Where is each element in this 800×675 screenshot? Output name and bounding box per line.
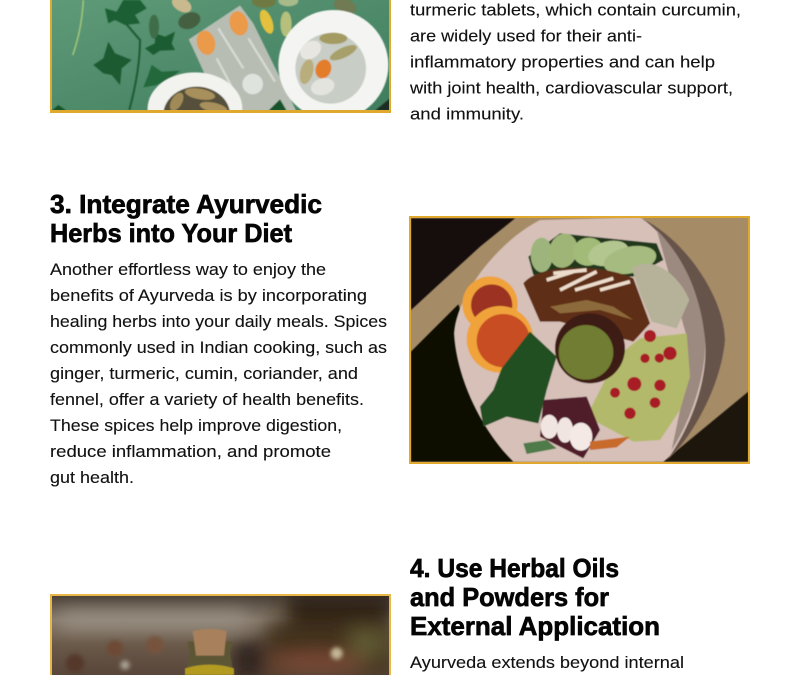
text block: healing herbs in daily meals: benefits of Ayurveda is by incorporating [50, 286, 367, 305]
text block: turmeric tablets continued: inflammatory properties and can help [410, 52, 715, 72]
heading: 4. Use Herbal Oils and Powders for External Application: and Powders for [410, 582, 609, 612]
text block: healing herbs in daily meals: healing herbs into your daily meals. Spices [50, 312, 387, 331]
heading: 4. Use Herbal Oils and Powders for External Application: External Application [410, 611, 660, 641]
heading: 4. Use Herbal Oils and Powders for External Application: 4. Use Herbal Oils [410, 553, 619, 583]
text block: Ayurveda external use: Ayurveda extends beyond internal [410, 653, 684, 672]
text block: healing herbs in daily meals [50, 260, 387, 487]
text block: turmeric tablets continued [409, 0, 741, 124]
text block: turmeric tablets continued: and immunity. [410, 104, 524, 124]
image: herbal supplements and tablets [50, 0, 391, 113]
heading: 3. Integrate Ayurvedic Herbs into Your Diet: 3. Integrate Ayurvedic [50, 189, 322, 219]
text block: turmeric tablets continued: are widely used for their anti- [410, 26, 642, 46]
heading: 3. Integrate Ayurvedic Herbs into Your Diet: Herbs into Your Diet [50, 218, 292, 248]
text block: healing herbs in daily meals: reduce inflammation, and promote [50, 442, 331, 461]
text block: healing herbs in daily meals: gut health. [50, 468, 134, 487]
heading: 4. Use Herbal Oils and Powders for External Application [410, 553, 660, 641]
text block: healing herbs in daily meals: ginger, turmeric, cumin, coriander, and [50, 364, 358, 383]
image: bottle of herbal oil [50, 592, 393, 675]
text block: healing herbs in daily meals: These spices help improve digestion, [50, 416, 342, 435]
image: plate of food with herbs and spices [409, 216, 750, 464]
text block: turmeric tablets continued: with joint health, cardiovascular support, [409, 78, 733, 98]
heading: 3. Integrate Ayurvedic Herbs into Your Diet [50, 189, 322, 248]
text block: healing herbs in daily meals: commonly used in Indian cooking, such as [50, 338, 387, 357]
text block: healing herbs in daily meals: fennel, offer a variety of health benefits. [50, 390, 364, 409]
text block: healing herbs in daily meals: Another effortless way to enjoy the [50, 260, 326, 279]
text block: turmeric tablets continued: turmeric tablets, which contain curcumin, [410, 0, 741, 20]
